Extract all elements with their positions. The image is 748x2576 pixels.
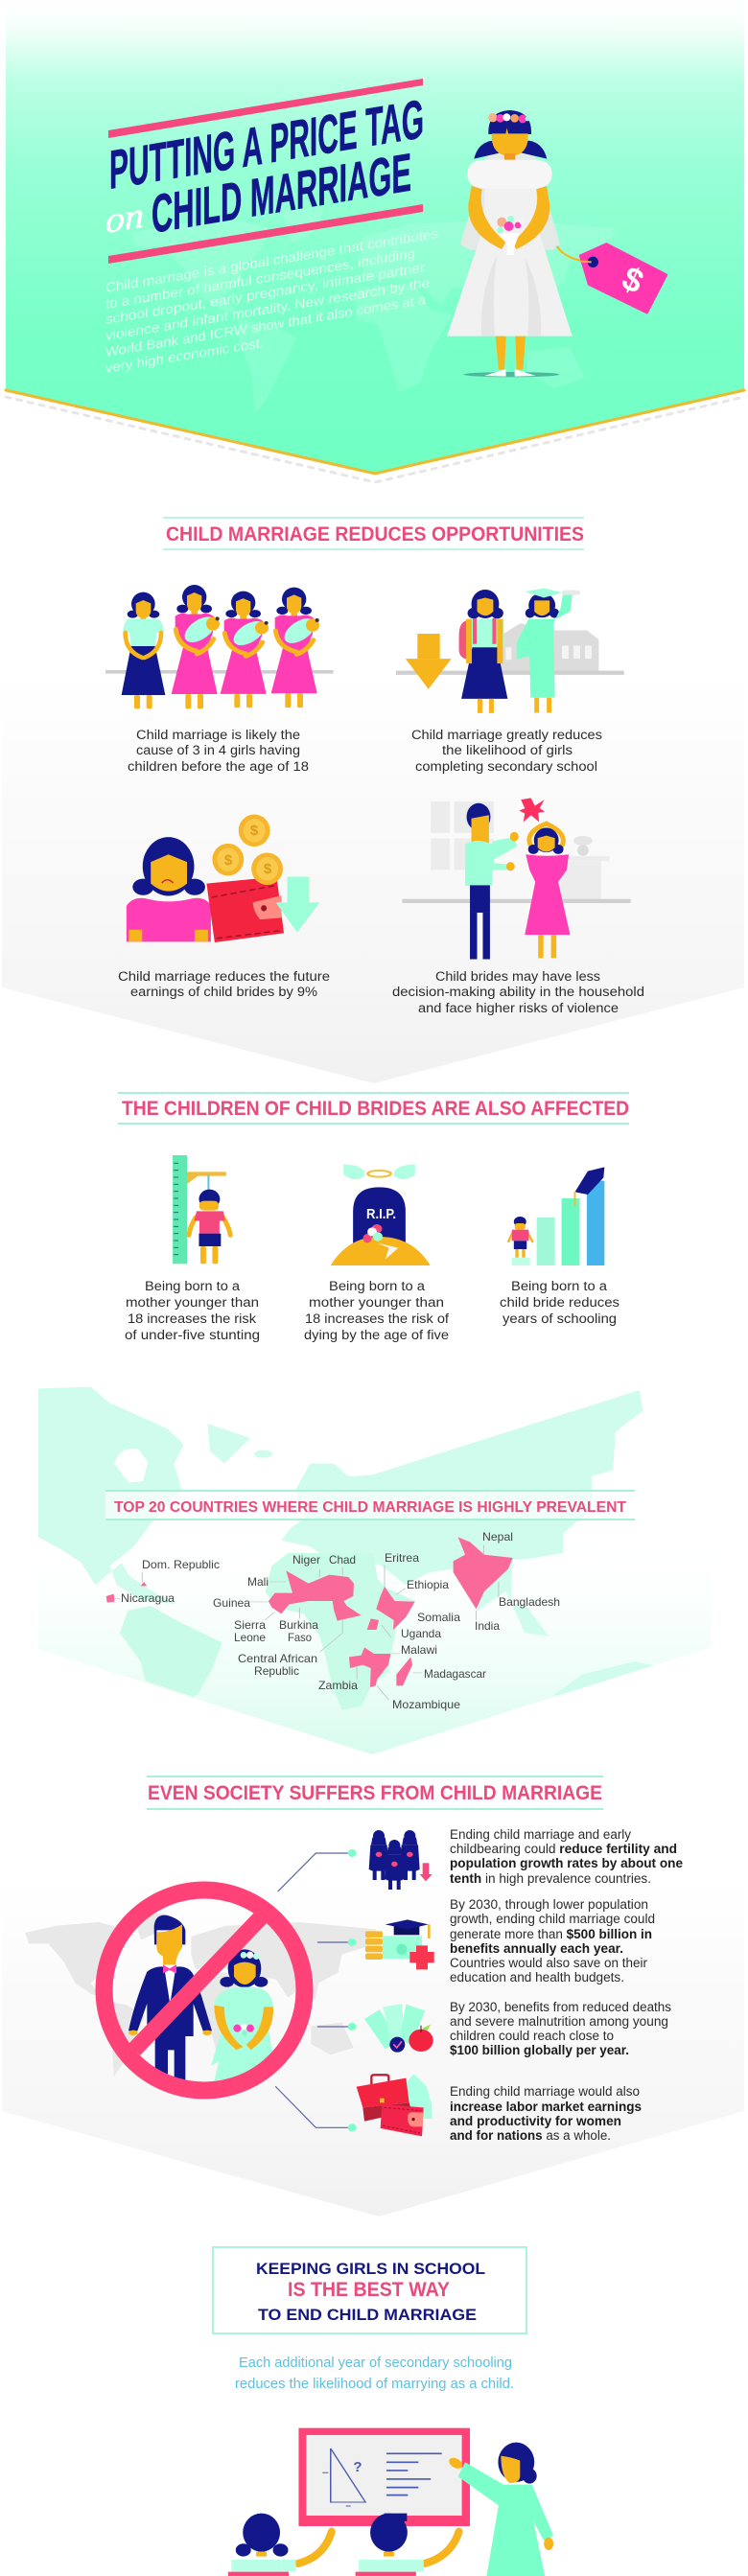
heading: children of child brides: [118, 1093, 629, 1124]
country labels: Leone: [234, 1631, 266, 1644]
coin dollar signs: [224, 823, 272, 877]
caption: decision-making and violence: decision-making ability in the household: [392, 985, 644, 999]
caption: years of schooling: child bride reduces: [500, 1295, 619, 1310]
text: labor market earnings: Ending child marriage would also: [450, 2084, 640, 2099]
caption: dying by age five: Being born to a: [329, 1279, 426, 1293]
coin dollar signs: $: [224, 852, 233, 869]
country labels: Burkina: [279, 1618, 318, 1632]
country labels: Niger: [292, 1553, 320, 1566]
caption: dying by age five: mother younger than: [309, 1295, 444, 1310]
country labels: Mozambique: [392, 1698, 460, 1711]
icon: stunted child at height ruler: [173, 1155, 230, 1264]
heading: even society suffers: [147, 1776, 603, 1809]
heading: even society suffers: EVEN SOCIETY SUFFERS FROM CHILD MARRIAGE: [148, 1782, 602, 1804]
country labels: India: [475, 1619, 500, 1633]
country labels: [121, 1530, 560, 1711]
caption: under-five stunting: 18 increases the risk: [128, 1311, 256, 1326]
text: 100 billion benefits: children could reach close to: [450, 2029, 614, 2043]
caption: three in four girls: [128, 728, 309, 774]
icon: three pregnant women with down arrow: [369, 1830, 432, 1890]
country labels: Bangladesh: [499, 1595, 560, 1609]
country labels: Uganda: [401, 1627, 441, 1640]
title block: on: [105, 196, 144, 242]
text: additional year of schooling: [235, 2355, 514, 2392]
panel: opportunities background: [2, 671, 744, 1083]
intro paragraph: very high economic cost.: [105, 335, 264, 376]
text: fertility and population: population growth rates by about one: [450, 1856, 683, 1870]
text: fertility and population: Ending child marriage and early: [450, 1827, 631, 1842]
text: 500 billion benefits: generate more than $500 billion in: [450, 1927, 652, 1941]
callout: keeping girls in school: TO END CHILD MARRIAGE: [258, 2306, 477, 2324]
board question mark: ?: [353, 2459, 362, 2475]
illustration: bride with price tag: [447, 110, 666, 377]
country labels: Dom. Republic: [142, 1558, 220, 1571]
caption: dying by age five: dying by the age of five: [304, 1328, 449, 1342]
title block: CHILD MARRIAGE: [152, 142, 411, 244]
caption: years of schooling: [500, 1279, 619, 1326]
illustration: classroom with teacher and students: [228, 2428, 553, 2576]
text: 500 billion benefits: By 2030, through lower population: [450, 1897, 648, 1912]
text: fertility and population: tenth in high prevalence countries.: [450, 1871, 651, 1886]
illustration: groom and bride in prohibition sign: [104, 1891, 305, 2090]
country labels: Sierra: [234, 1618, 266, 1632]
text: 100 billion benefits: and severe malnutrition among young: [450, 2014, 668, 2029]
country labels: Eritrea: [385, 1551, 419, 1565]
map panel: prevalence world map: [38, 1387, 711, 1754]
illustration: man threatening child bride: [402, 798, 631, 960]
heading: child marriage reduces opportunities: CHILD MARRIAGE REDUCES OPPORTUNITIES: [166, 523, 584, 545]
icon: gravestone with halo: [331, 1164, 431, 1265]
text: labor market earnings: increase labor market earnings: [450, 2100, 642, 2114]
world map watermark: [131, 208, 618, 415]
icon: coins, bill, cap and cross: [365, 1919, 434, 1969]
caption: three in four girls: children before the age of 18: [128, 759, 309, 774]
illustration: girls and child mothers: [105, 585, 334, 708]
heading: top 20 countries: TOP 20 COUNTRIES WHERE CHILD MARRIAGE IS HIGHLY PREVALENT: [114, 1499, 627, 1516]
caption: decision-making and violence: and face higher risks of violence: [418, 1001, 619, 1015]
caption: dying by age five: [304, 1279, 449, 1342]
text: 500 billion benefits: benefits annually each year.: [450, 1941, 623, 1956]
caption: three in four girls: cause of 3 in 4 girls having: [136, 743, 300, 757]
country labels: Chad: [329, 1553, 356, 1566]
caption: under-five stunting: mother younger than: [126, 1295, 259, 1310]
callout: keeping girls in school: KEEPING GIRLS IN SCHOOL: [256, 2260, 485, 2278]
heading: child marriage reduces opportunities: [163, 518, 584, 549]
country labels: Nepal: [482, 1530, 513, 1543]
caption: secondary school: [411, 728, 602, 774]
text: labor market earnings: [450, 2084, 642, 2143]
caption: under-five stunting: Being born to a: [145, 1279, 241, 1293]
caption: decision-making and violence: [392, 969, 644, 1015]
text: 500 billion benefits: education and health budgets.: [450, 1970, 624, 1984]
text: additional year of schooling: reduces the likelihood of marrying as a child.: [235, 2376, 514, 2392]
intro paragraph: Child marriage is a global challenge that contributes: [105, 225, 438, 295]
intro paragraph: World Bank and ICRW show that it also comes at a: [105, 291, 426, 360]
text: fertility and population: childbearing could reduce fertility and: [450, 1842, 677, 1856]
caption: future earnings: earnings of child brides by 9%: [130, 985, 317, 999]
country labels: Zambia: [318, 1679, 358, 1692]
country labels: Mali: [247, 1575, 269, 1589]
callout: keeping girls in school: [213, 2247, 526, 2333]
coin dollar signs: $: [264, 861, 272, 877]
illustration: school girl and graduate: [396, 589, 624, 713]
coin dollar signs: $: [250, 823, 259, 839]
caption: years of schooling: years of schooling: [503, 1311, 617, 1326]
heading: children of child brides: THE CHILDREN OF CHILD BRIDES ARE ALSO AFFECTED: [122, 1098, 629, 1120]
panel: hero background: [6, 0, 744, 482]
caption: years of schooling: Being born to a: [511, 1279, 608, 1293]
text: 100 billion benefits: By 2030, benefits from reduced deaths: [450, 2000, 671, 2014]
caption: dying by age five: 18 increases the risk of: [305, 1311, 449, 1326]
text: 100 billion benefits: $100 billion globally per year.: [450, 2043, 629, 2057]
intro paragraph: [105, 225, 438, 376]
country labels: Ethiopia: [407, 1578, 449, 1591]
country labels: Republic: [254, 1664, 299, 1678]
caption: under-five stunting: [125, 1279, 260, 1342]
title block: [105, 79, 424, 264]
text: additional year of schooling: Each additional year of secondary schooling: [239, 2355, 512, 2371]
country labels: Malawi: [401, 1643, 437, 1657]
text: 500 billion benefits: Countries would also save on their: [450, 1956, 647, 1970]
icon: briefcase, bills and wallet: [357, 2074, 432, 2136]
country labels: Central African: [238, 1652, 317, 1665]
connector lines: [276, 1849, 357, 2131]
text: 500 billion benefits: growth, ending child marriage could: [450, 1912, 655, 1926]
caption: three in four girls: Child marriage is likely the: [136, 728, 300, 742]
callout: keeping girls in school: IS THE BEST WAY: [288, 2279, 450, 2301]
caption: future earnings: Child marriage reduces the future: [118, 969, 330, 984]
icon: child beside rising bars with cap: [508, 1167, 604, 1265]
caption: under-five stunting: of under-five stunting: [125, 1328, 260, 1342]
text: labor market earnings: and productivity for women: [450, 2114, 621, 2128]
caption: future earnings: [118, 969, 330, 999]
grey world map watermark: [25, 1914, 377, 2077]
intro paragraph: to a number of harmful consequences, including: [105, 245, 415, 312]
text: labor market earnings: and for nations as a whole.: [450, 2128, 611, 2143]
title block: PUTTING A PRICE TAG: [109, 88, 424, 201]
caption: secondary school: Child marriage greatly reduces: [411, 728, 602, 742]
country labels: Nicaragua: [121, 1591, 175, 1605]
text: fertility and population: [450, 1827, 683, 1886]
caption: secondary school: completing secondary school: [415, 759, 597, 774]
country labels: Faso: [288, 1631, 312, 1644]
illustration: bride with price tag: $: [617, 259, 649, 301]
country labels: Somalia: [417, 1611, 460, 1624]
heading: top 20 countries: [105, 1491, 635, 1520]
caption: decision-making and violence: Child brides may have less: [435, 969, 600, 984]
text: 500 billion benefits: [450, 1897, 655, 1984]
highlighted countries: [106, 1537, 513, 1700]
intro paragraph: school dropout, early pregnancy, intimate partner: [105, 259, 425, 327]
icon: bills, check and apple: [364, 2004, 433, 2053]
country labels: Madagascar: [424, 1667, 486, 1681]
text: 100 billion benefits: [450, 2000, 671, 2057]
gravestone inscription: R.I.P.: [366, 1206, 396, 1222]
country labels: Guinea: [213, 1596, 250, 1610]
intro paragraph: violence and infant mortality. New research by the: [105, 274, 430, 343]
illustration: sad girl with wallet and coins: [127, 815, 319, 942]
panel: society background: [2, 1879, 744, 2216]
caption: secondary school: the likelihood of girls: [442, 743, 573, 757]
